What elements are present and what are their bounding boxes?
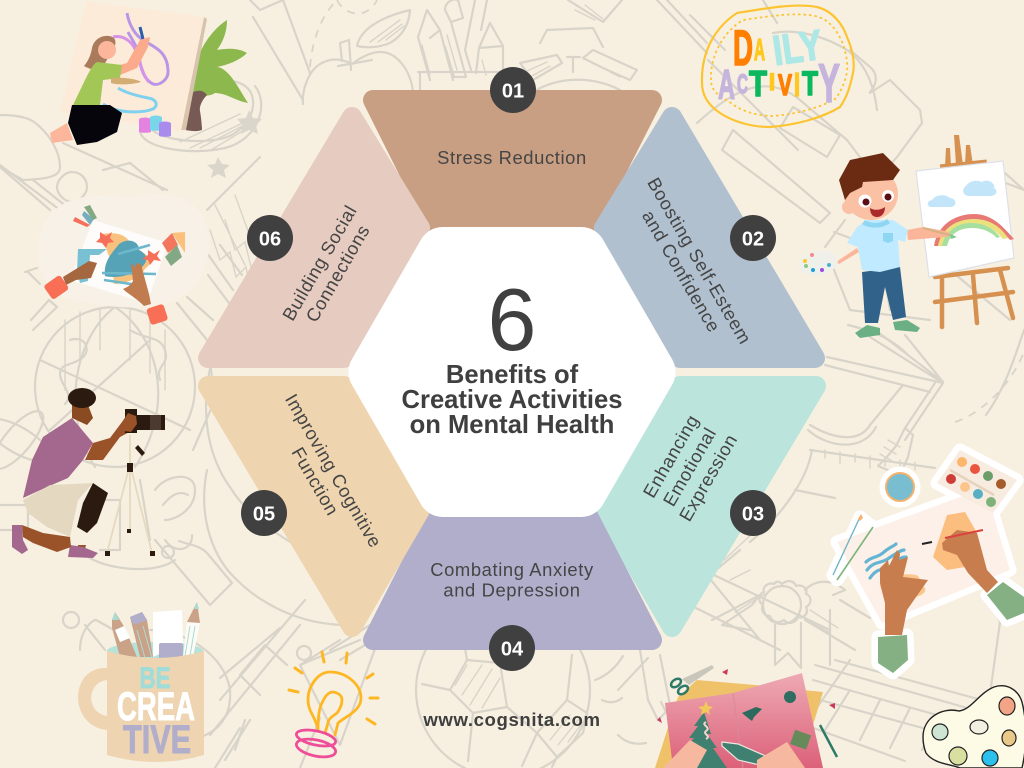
petal 05: improving cognitive function — [208, 386, 420, 627]
number badge 01: 01 — [502, 80, 524, 102]
petal 02: boosting self-esteem — [604, 117, 815, 358]
bottom left: compass and funnel — [210, 600, 380, 768]
petal 03: enhancing emotional expression: Enhancing — [639, 411, 703, 501]
illustration: be creative mug: BE — [140, 662, 170, 695]
illustration: be creative mug: CREA — [117, 685, 195, 729]
big number 6: 6 — [488, 270, 536, 369]
logo: daily activity badge: I — [794, 66, 800, 103]
illustration: hands crafting collage — [38, 194, 209, 325]
number badge 01 — [490, 67, 536, 113]
number badge 06 — [247, 215, 293, 261]
illustration: christmas card craft — [655, 665, 837, 768]
number badge 06: 06 — [259, 228, 281, 250]
logo: daily activity badge: A — [718, 61, 735, 108]
petal 04: combating anxiety and depression — [373, 510, 652, 640]
title text: on Mental Health — [410, 411, 614, 439]
icon: light bulb — [289, 652, 378, 760]
illustration: be creative mug: TIVE — [123, 718, 191, 762]
petal 05: improving cognitive function: Function — [288, 443, 343, 519]
logo: daily activity badge: D — [733, 20, 753, 76]
title text: Benefits of — [446, 361, 579, 389]
number badge 05: 05 — [253, 504, 275, 526]
illustration: be creative mug — [78, 602, 204, 762]
ruler, ribbon, laptop — [710, 450, 935, 575]
logo: daily activity badge: Y — [818, 52, 840, 114]
left: globe — [35, 307, 195, 467]
petal 01: stress reduction: Stress Reduction — [437, 147, 587, 168]
petal 06: building social connections: Connections — [301, 221, 374, 326]
petal 04: combating anxiety and depression: and Depression — [443, 580, 581, 600]
petal 02: boosting self-esteem: and Confidence — [638, 207, 725, 336]
illustration: boy painting a rainbow on easel — [797, 135, 1014, 338]
number badge 05 — [241, 490, 287, 536]
illustration: photographer with camera on tripod — [12, 388, 165, 558]
illustration: woman painting on canvas with plant — [50, 1, 248, 145]
title text: Creative Activities — [402, 386, 622, 414]
petal 01: stress reduction — [373, 100, 652, 232]
logo: daily activity badge: T — [802, 65, 818, 103]
logo: daily activity badge: T — [749, 63, 767, 104]
logo: daily activity badge: A — [754, 32, 765, 67]
logo: daily activity badge: I — [769, 69, 775, 96]
petal 06: building social connections: Building Social — [278, 201, 361, 324]
top centre: apple, pencil cup, clock — [303, 52, 413, 104]
illustration: hands painting with palette sticker — [833, 450, 1024, 673]
petal 03: enhancing emotional expression — [604, 386, 816, 627]
left: arcs — [204, 360, 347, 625]
petal 02: boosting self-esteem: Boosting Self-Esteem — [643, 174, 756, 348]
number badge 02: 02 — [742, 228, 764, 250]
icon: artist paint palette — [923, 686, 1024, 768]
logo: daily activity badge — [702, 6, 854, 127]
number badge 04 — [489, 625, 535, 671]
petal 04: combating anxiety and depression: Combating Anxiety — [430, 559, 594, 580]
top right: backpack — [657, 0, 798, 150]
petal 06: building social connections — [208, 117, 420, 358]
bottom centre: soccer ball — [416, 603, 590, 768]
logo: daily activity badge: V — [778, 69, 792, 102]
number badge 02 — [730, 215, 776, 261]
upper left: rocket, book, planet — [0, 115, 167, 210]
petal 03: enhancing emotional expression: Expression — [675, 430, 741, 525]
petal 03: enhancing emotional expression: Emotional — [658, 424, 720, 510]
number badge 03: 03 — [742, 504, 764, 526]
graduation cap and tassel — [808, 332, 943, 445]
petal 05: improving cognitive function: Improving Cognitive — [281, 390, 386, 551]
logo: daily activity badge: ILY — [770, 21, 825, 74]
number badge 04: 04 — [501, 638, 524, 660]
logo: daily activity badge: C — [737, 69, 748, 99]
number badge 03 — [730, 490, 776, 536]
website url: www.cogsnita.com — [422, 709, 601, 730]
center hexagon with title — [373, 252, 651, 492]
